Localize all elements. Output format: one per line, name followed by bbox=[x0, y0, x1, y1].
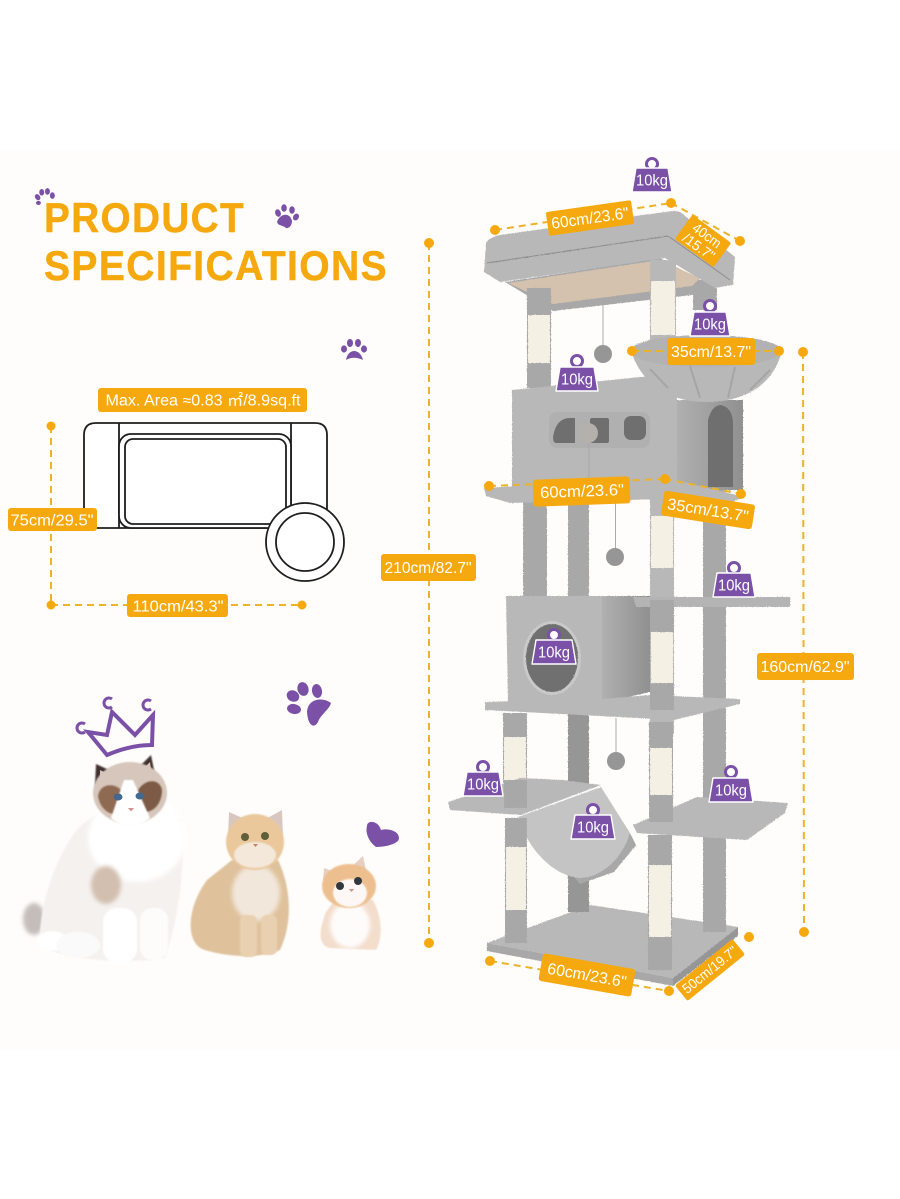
label: bowl width: 35cm/13.7" bbox=[671, 344, 751, 361]
condo windows bbox=[553, 416, 646, 443]
window ball and rear arch door bbox=[578, 405, 733, 495]
label: top depth: 40cm bbox=[689, 219, 725, 251]
label: 110cm: 110cm/43.3" bbox=[132, 598, 224, 616]
weight badge: upper condo: 10kg bbox=[561, 372, 593, 388]
post over right shelf bbox=[650, 600, 674, 632]
weight badge: right shelf: 10kg bbox=[718, 578, 750, 594]
weight badge: bowl: 10kg bbox=[694, 316, 726, 334]
center post over shelf bbox=[649, 795, 673, 822]
label: max area bbox=[98, 388, 307, 412]
bottom posts bbox=[505, 818, 672, 970]
label: platform height: 160cm/62.9" bbox=[760, 659, 850, 676]
weight badge: left shelf bbox=[463, 762, 503, 796]
weight badge: lower condo bbox=[532, 630, 576, 664]
weight badge: top perch: 10kg bbox=[636, 172, 668, 190]
label: 75cm: 75cm/29.5" bbox=[10, 512, 94, 530]
dimension line: bowl bbox=[627, 346, 784, 356]
title: PRODUCT bbox=[44, 194, 245, 241]
upper posts bbox=[527, 260, 676, 400]
weight badge: lower condo: 10kg bbox=[538, 644, 570, 662]
cat: kitten bbox=[321, 856, 381, 950]
weight badge: right lower shelf: 10kg bbox=[715, 782, 747, 800]
upper left condo bbox=[512, 376, 743, 492]
weight badge: bowl bbox=[690, 300, 730, 336]
hammock bbox=[518, 787, 636, 884]
label: max area: Max. Area ≈0.83 ㎡/8.9sq.ft bbox=[106, 392, 301, 410]
weight badge: left shelf: 10kg bbox=[467, 776, 499, 794]
label: top depth bbox=[675, 215, 731, 267]
label: 110cm bbox=[127, 594, 228, 617]
dimension lines: middle platform bbox=[484, 474, 746, 499]
label: total height: 210cm/82.7" bbox=[384, 560, 472, 577]
base bbox=[487, 905, 738, 986]
lower posts bbox=[503, 713, 673, 822]
cat tree bbox=[448, 211, 790, 986]
left post over shelf bbox=[504, 780, 527, 808]
label: platform width bbox=[533, 476, 630, 507]
label: platform width: 60cm/23.6" bbox=[540, 482, 624, 502]
label: base width: 60cm/23.6" bbox=[546, 961, 628, 991]
cat: ragdoll bbox=[23, 755, 186, 963]
middle center post bbox=[650, 499, 674, 734]
top perch bbox=[484, 211, 735, 311]
right shelf bbox=[633, 797, 788, 840]
pom strings and balls bbox=[594, 303, 625, 770]
icon: paw above sofa bbox=[341, 339, 367, 360]
icon: crown bbox=[77, 698, 153, 755]
dimension line: 160cm bbox=[798, 347, 809, 937]
title bbox=[44, 194, 388, 289]
label: top depth: /15.7" bbox=[680, 230, 718, 264]
label: platform depth bbox=[661, 490, 755, 530]
label: total height bbox=[381, 554, 476, 581]
title: SPECIFICATIONS bbox=[44, 242, 388, 289]
dimension lines: top perch bbox=[490, 198, 745, 246]
weight badge: hammock bbox=[571, 804, 615, 839]
label: top width: 60cm/23.6" bbox=[550, 205, 630, 233]
left shelf bbox=[448, 778, 601, 815]
panel: footprint diagram bbox=[8, 388, 344, 617]
label: platform depth: 35cm/13.7" bbox=[666, 496, 750, 526]
bowl perch bbox=[630, 335, 783, 402]
icon: paw right of title bbox=[274, 204, 300, 228]
icon: large paw bbox=[285, 681, 331, 726]
label: base depth: 50cm/19.7" bbox=[679, 943, 740, 997]
label: 75cm bbox=[8, 508, 97, 531]
weight badge: hammock: 10kg bbox=[577, 820, 609, 836]
label: platform height bbox=[757, 653, 854, 680]
weight badge: right lower shelf bbox=[709, 766, 753, 802]
cat: golden shorthair bbox=[191, 810, 289, 957]
third platform bbox=[485, 683, 740, 720]
weight badge: right shelf bbox=[713, 562, 755, 597]
icon: paw by title bbox=[34, 188, 55, 205]
dimension line: 210cm bbox=[424, 238, 434, 948]
label: base width bbox=[538, 953, 636, 997]
icon: heart bbox=[366, 822, 399, 847]
dimension lines: base bbox=[485, 932, 754, 996]
second platform bbox=[484, 477, 744, 506]
lower condo bbox=[506, 596, 790, 703]
sofa outline bbox=[84, 423, 344, 581]
rear posts bbox=[523, 280, 726, 932]
weight badge: top perch bbox=[632, 158, 672, 192]
label: bowl width bbox=[667, 338, 755, 365]
weight badge: upper condo bbox=[556, 356, 598, 391]
width dimension line bbox=[46, 422, 306, 610]
